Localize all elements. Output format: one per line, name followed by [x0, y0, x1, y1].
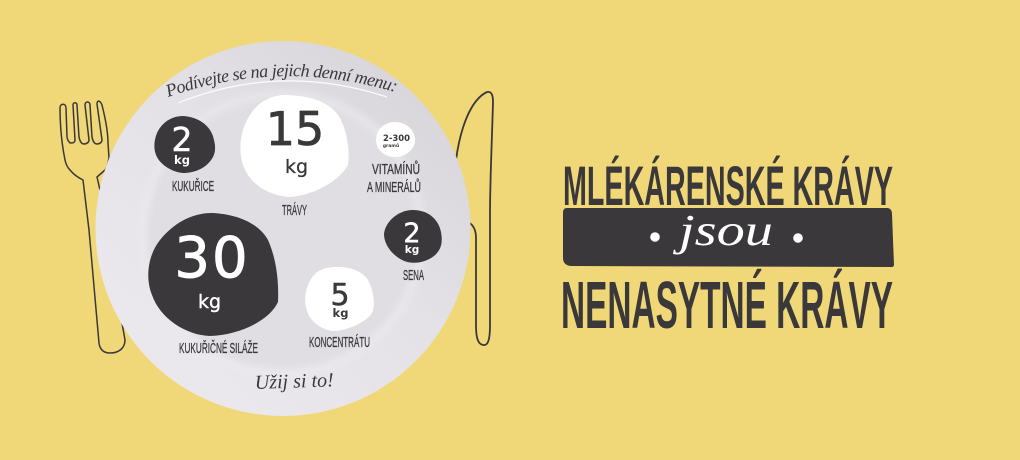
- item: sena: SENA: [403, 267, 424, 284]
- item: koncentrátu: [305, 267, 374, 351]
- item: koncentrátu: kg: [333, 306, 348, 320]
- item: vitamíny a minerály: gramů: [383, 142, 399, 149]
- item: vitamíny a minerály: VITAMÍNŮ: [372, 160, 420, 178]
- banner: jsou: [673, 206, 773, 255]
- banner: [563, 206, 894, 267]
- item: koncentrátu: 5: [330, 278, 350, 313]
- item: trávy: 15: [266, 102, 324, 156]
- item: trávy: TRÁVY: [282, 202, 307, 219]
- item: kukuřice: 2: [172, 120, 192, 159]
- item: kukuřice: kg: [174, 153, 190, 167]
- title: [561, 154, 894, 343]
- item: vitamíny a minerály: A MINERÁLŮ: [367, 178, 421, 196]
- item: kukuřičné siláže: kg: [198, 291, 221, 313]
- item: kukuřice: KUKUŘICE: [172, 178, 214, 195]
- panel: plate: [96, 41, 470, 416]
- item: kukuřičné siláže: 30: [174, 226, 250, 291]
- icon: knife: [456, 92, 493, 345]
- item: koncentrátu: KONCENTRÁTU: [309, 334, 370, 351]
- item: trávy: kg: [285, 156, 308, 178]
- item: sena: [384, 210, 442, 284]
- plate heading: Podívejte se na jejich denní menu:: [166, 64, 396, 97]
- item: kukuřice: [154, 116, 215, 195]
- icon: fork: [60, 101, 125, 353]
- item: trávy: [240, 95, 349, 219]
- item: kukuřičné siláže: [148, 213, 278, 357]
- item: sena: kg: [405, 244, 419, 256]
- item: kukuřičné siláže: KUKUŘIČNÉ SILÁŽE: [179, 340, 258, 357]
- item: vitamíny a minerály: [367, 122, 421, 196]
- closing note: Užij si to!: [254, 369, 334, 394]
- item: sena: 2: [403, 218, 421, 249]
- item: vitamíny a minerály: 2-300: [383, 134, 410, 144]
